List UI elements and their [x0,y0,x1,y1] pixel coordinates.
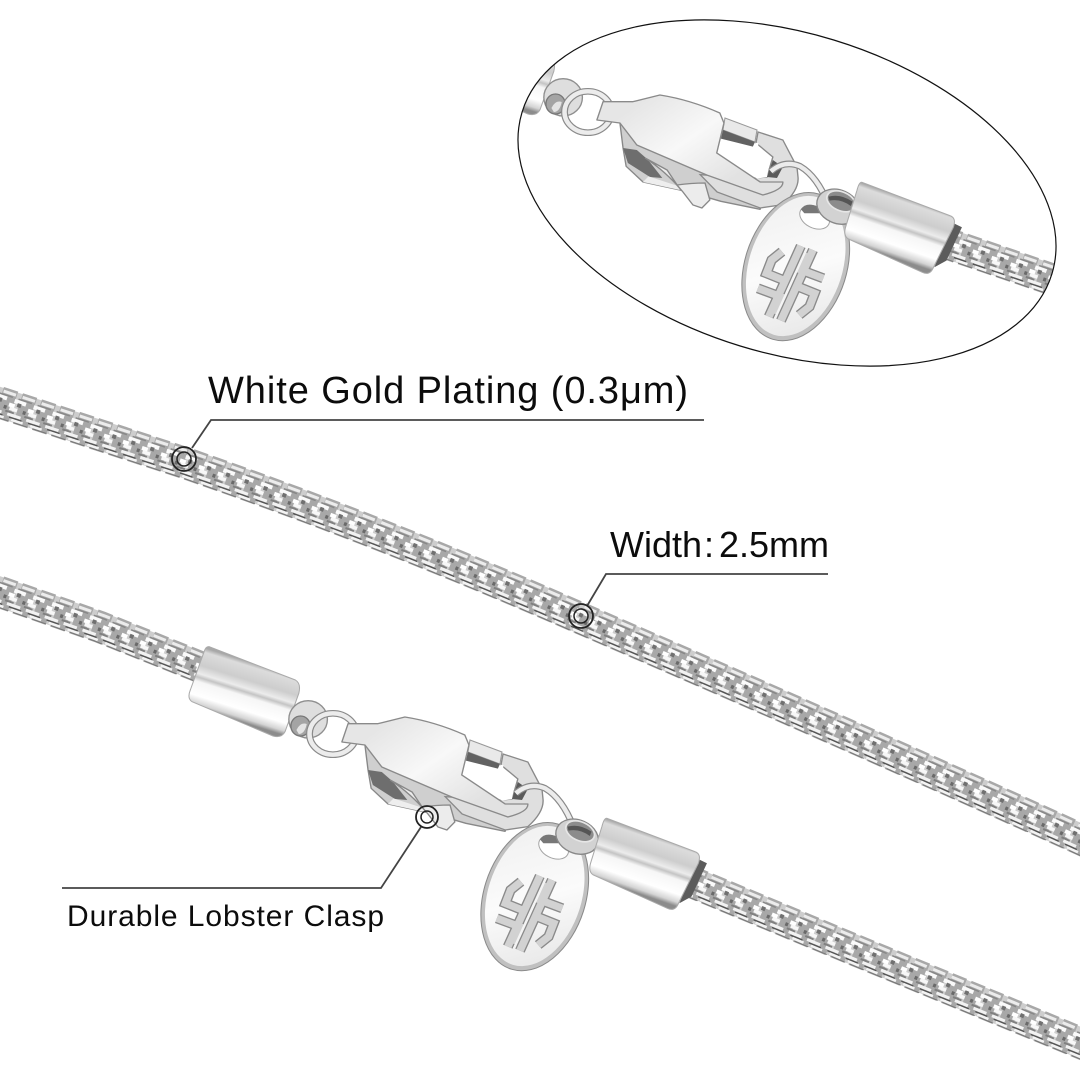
label: : [704,524,714,565]
upper chain [0,385,1080,862]
inset clasp [544,79,828,209]
lower clasp assembly [189,647,707,984]
leader line [192,420,704,448]
marker ring [416,806,438,828]
inset end cap [845,182,962,273]
label: White Gold Plating (0.3μm) [208,370,688,412]
inset outline [475,0,1080,427]
callout: lobster clasp [62,806,438,933]
left end cap [189,647,300,737]
label: Durable Lobster Clasp [67,900,384,933]
label: 2.5mm [719,524,829,565]
inset white fill [500,0,1080,380]
right end cap [590,818,707,909]
inset clipped contents [522,64,1054,342]
leader line [587,574,828,606]
detail inset oval [517,19,1057,367]
lower chain right section [664,862,1080,1065]
inset chain [946,231,1054,294]
marker ring [569,604,593,628]
marker ring [172,447,196,471]
oval logo tag [463,810,606,984]
inset left end cap [522,64,555,116]
label: Width [610,524,702,565]
lower chain left section [0,574,220,687]
leader line [62,827,421,888]
callout: width [569,524,829,628]
inset tag [741,188,854,342]
lobster clasp [289,701,573,831]
callout: white gold plating [172,370,704,471]
